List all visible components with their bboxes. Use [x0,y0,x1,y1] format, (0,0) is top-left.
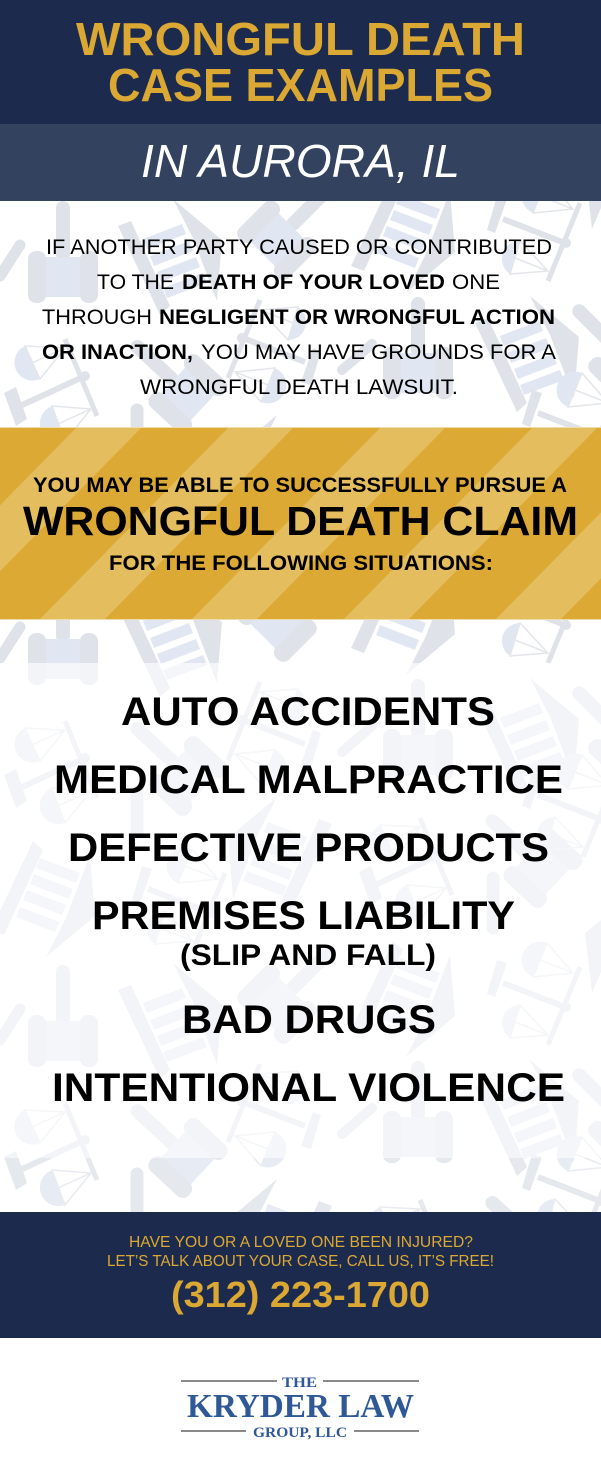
banner heading [23,474,578,575]
list of wrongful death situations [52,690,565,1110]
intro text block: NEGLIGENT OR WRONGFUL ACTION [159,306,555,329]
logo: The Kryder Law Group: GROUP, LLC [253,1425,347,1441]
title: CASE EXAMPLES [108,59,493,111]
list of wrongful death situations: AUTO ACCIDENTS [121,690,495,734]
intro text block: THROUGH [42,306,152,329]
logo: The Kryder Law Group: KRYDER LAW [187,1388,414,1425]
intro text block: DEATH OF YOUR LOVED [182,271,445,294]
background pattern: situations section [0,620,601,1212]
intro text block [42,236,556,399]
logo: The Kryder Law Group [181,1375,419,1441]
banner heading: YOU MAY BE ABLE TO SUCCESSFULLY PURSUE A [33,474,567,497]
phone number: (312) 223-1700 [171,1274,430,1315]
intro text block: TO THE [97,271,174,294]
banner heading: WRONGFUL DEATH CLAIM [23,498,578,544]
intro text block: YOU MAY HAVE GROUNDS FOR A [201,341,556,364]
banner heading: FOR THE FOLLOWING SITUATIONS: [109,552,493,575]
panel: location subtitle band [0,124,601,201]
list of wrongful death situations: (SLIP AND FALL) [180,939,436,972]
list of wrongful death situations: BAD DRUGS [182,998,436,1042]
call to action text [107,1234,494,1270]
logo: The Kryder Law Group: THE [282,1375,317,1391]
intro text block: WRONGFUL DEATH LAWSUIT. [140,376,458,399]
call to action text: HAVE YOU OR A LOVED ONE BEEN INJURED? [129,1234,473,1251]
intro text block: OR INACTION, [42,341,193,364]
title: WRONGFUL DEATH [76,13,525,65]
title [76,13,525,111]
list of wrongful death situations: DEFECTIVE PRODUCTS [68,826,549,870]
panel: call to action footer [0,1212,601,1338]
intro text block: IF ANOTHER PARTY CAUSED OR CONTRIBUTED [46,236,552,259]
call to action text: LET’S TALK ABOUT YOUR CASE, CALL US, IT’S FREE! [107,1253,494,1270]
intro text block: ONE [452,271,500,294]
background pattern: intro section [0,201,601,427]
list of wrongful death situations: PREMISES LIABILITY [92,894,515,938]
subtitle: IN AURORA, IL [141,135,460,187]
panel: title header [0,0,601,124]
list of wrongful death situations: MEDICAL MALPRACTICE [54,758,563,802]
list of wrongful death situations: INTENTIONAL VIOLENCE [52,1066,565,1110]
panel: gold striped banner [0,427,601,620]
